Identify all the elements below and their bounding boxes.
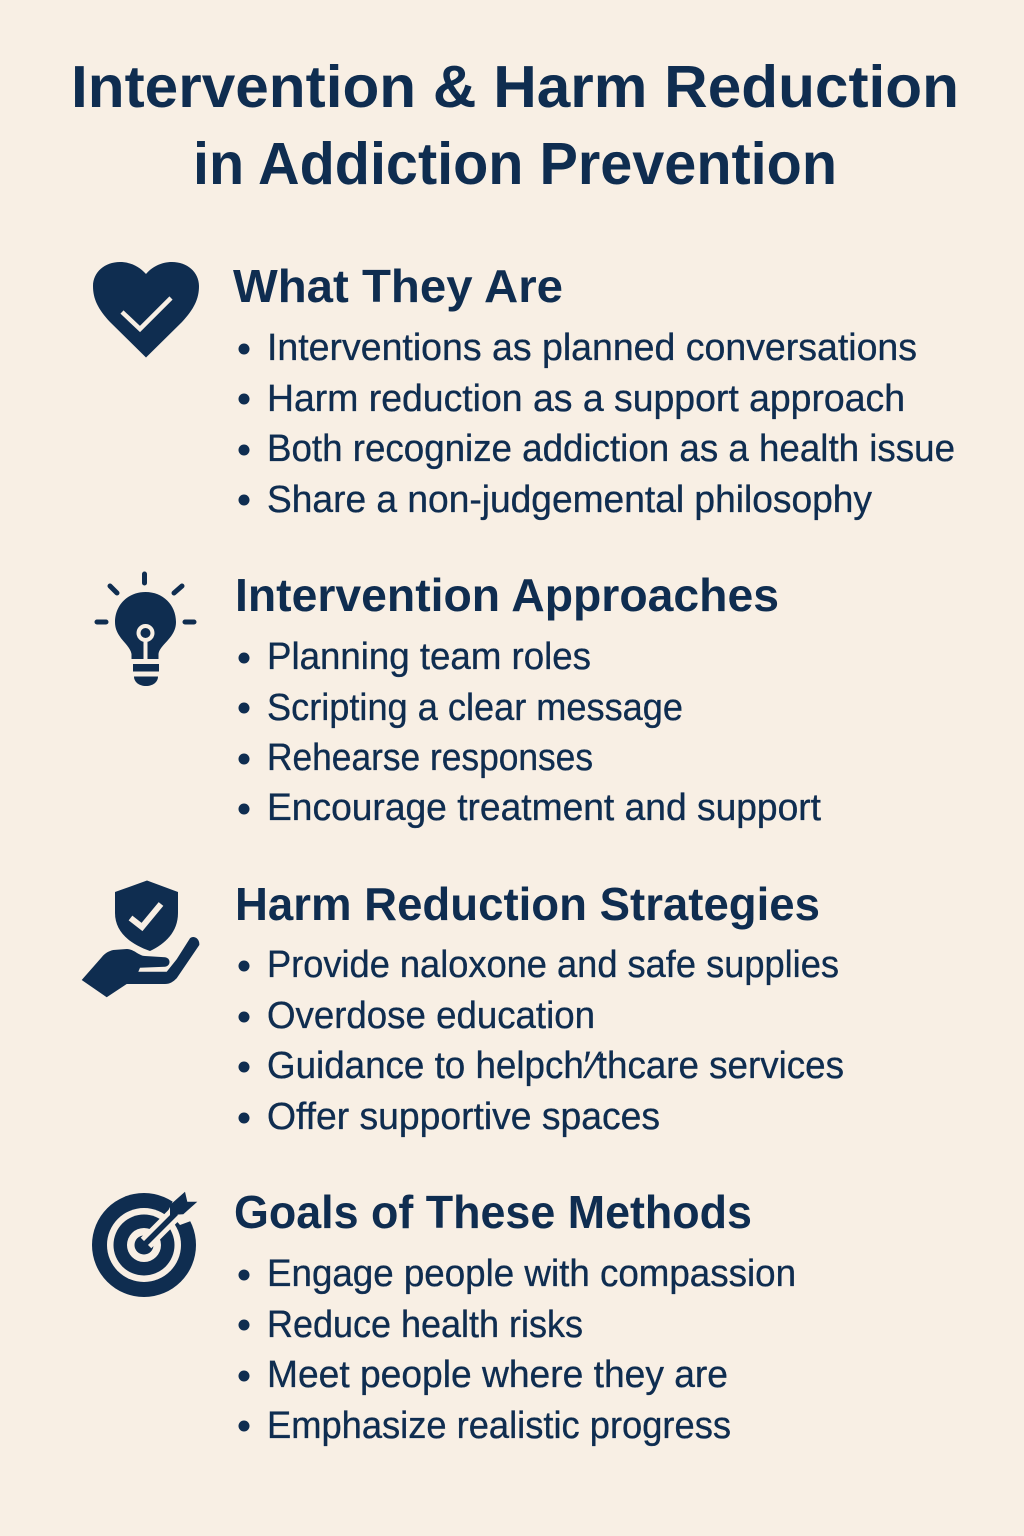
- bullet list: harm reduction strategies: [238, 944, 844, 1138]
- bullet list: goals of these methods: [238, 1253, 796, 1447]
- bullet list: goals of these methods: Reduce health risks: [267, 1304, 583, 1346]
- title: in Addiction Prevention: [193, 131, 837, 197]
- bullet list: what they are: [238, 327, 955, 521]
- icon: target with arrow: [92, 1192, 199, 1297]
- bullet list: what they are: Both recognize addiction as a health issue: [267, 428, 955, 470]
- bullet list: goals of these methods: Meet people where they are: [267, 1354, 728, 1396]
- bullet list: goals of these methods: Engage people with compassion: [267, 1253, 796, 1295]
- bullet list: harm reduction strategies: Offer supportive spaces: [267, 1096, 660, 1138]
- heading: harm reduction strategies: Harm Reduction Strategies: [235, 878, 820, 930]
- bullet list: intervention approaches: Rehearse responses: [267, 737, 593, 779]
- bullet list: harm reduction strategies: Guidance to helpch′⁄thcare services: [267, 1045, 844, 1087]
- bullet list: intervention approaches: Scripting a clear message: [267, 687, 683, 729]
- heading: intervention approaches: Intervention Approaches: [235, 569, 779, 621]
- bullet list: what they are: Interventions as planned conversations: [267, 327, 917, 369]
- bullet list: intervention approaches: Planning team roles: [267, 636, 591, 678]
- heading: what they are: What They Are: [233, 260, 563, 312]
- bullet list: harm reduction strategies: Provide naloxone and safe supplies: [267, 944, 839, 986]
- panel: what they are: [93, 260, 955, 521]
- icon: shield over open hand: [82, 880, 199, 997]
- bullet list: goals of these methods: Emphasize realistic progress: [267, 1405, 731, 1447]
- panel: harm reduction strategies: [82, 878, 844, 1138]
- panel: intervention approaches: [97, 569, 821, 829]
- bullet list: harm reduction strategies: Overdose education: [267, 995, 595, 1037]
- bullet list: what they are: Share a non-judgemental philosophy: [267, 479, 872, 521]
- heading: goals of these methods: Goals of These Methods: [234, 1186, 752, 1238]
- bullet list: intervention approaches: Encourage treatment and support: [267, 787, 821, 829]
- icon: light bulb: [97, 574, 194, 686]
- panel: goals of these methods: [92, 1186, 796, 1447]
- bullet list: intervention approaches: [238, 636, 821, 829]
- bullet list: what they are: Harm reduction as a support approach: [267, 378, 905, 420]
- icon: heart with check: [93, 262, 199, 358]
- title: [71, 54, 959, 197]
- title: Intervention & Harm Reduction: [71, 54, 959, 120]
